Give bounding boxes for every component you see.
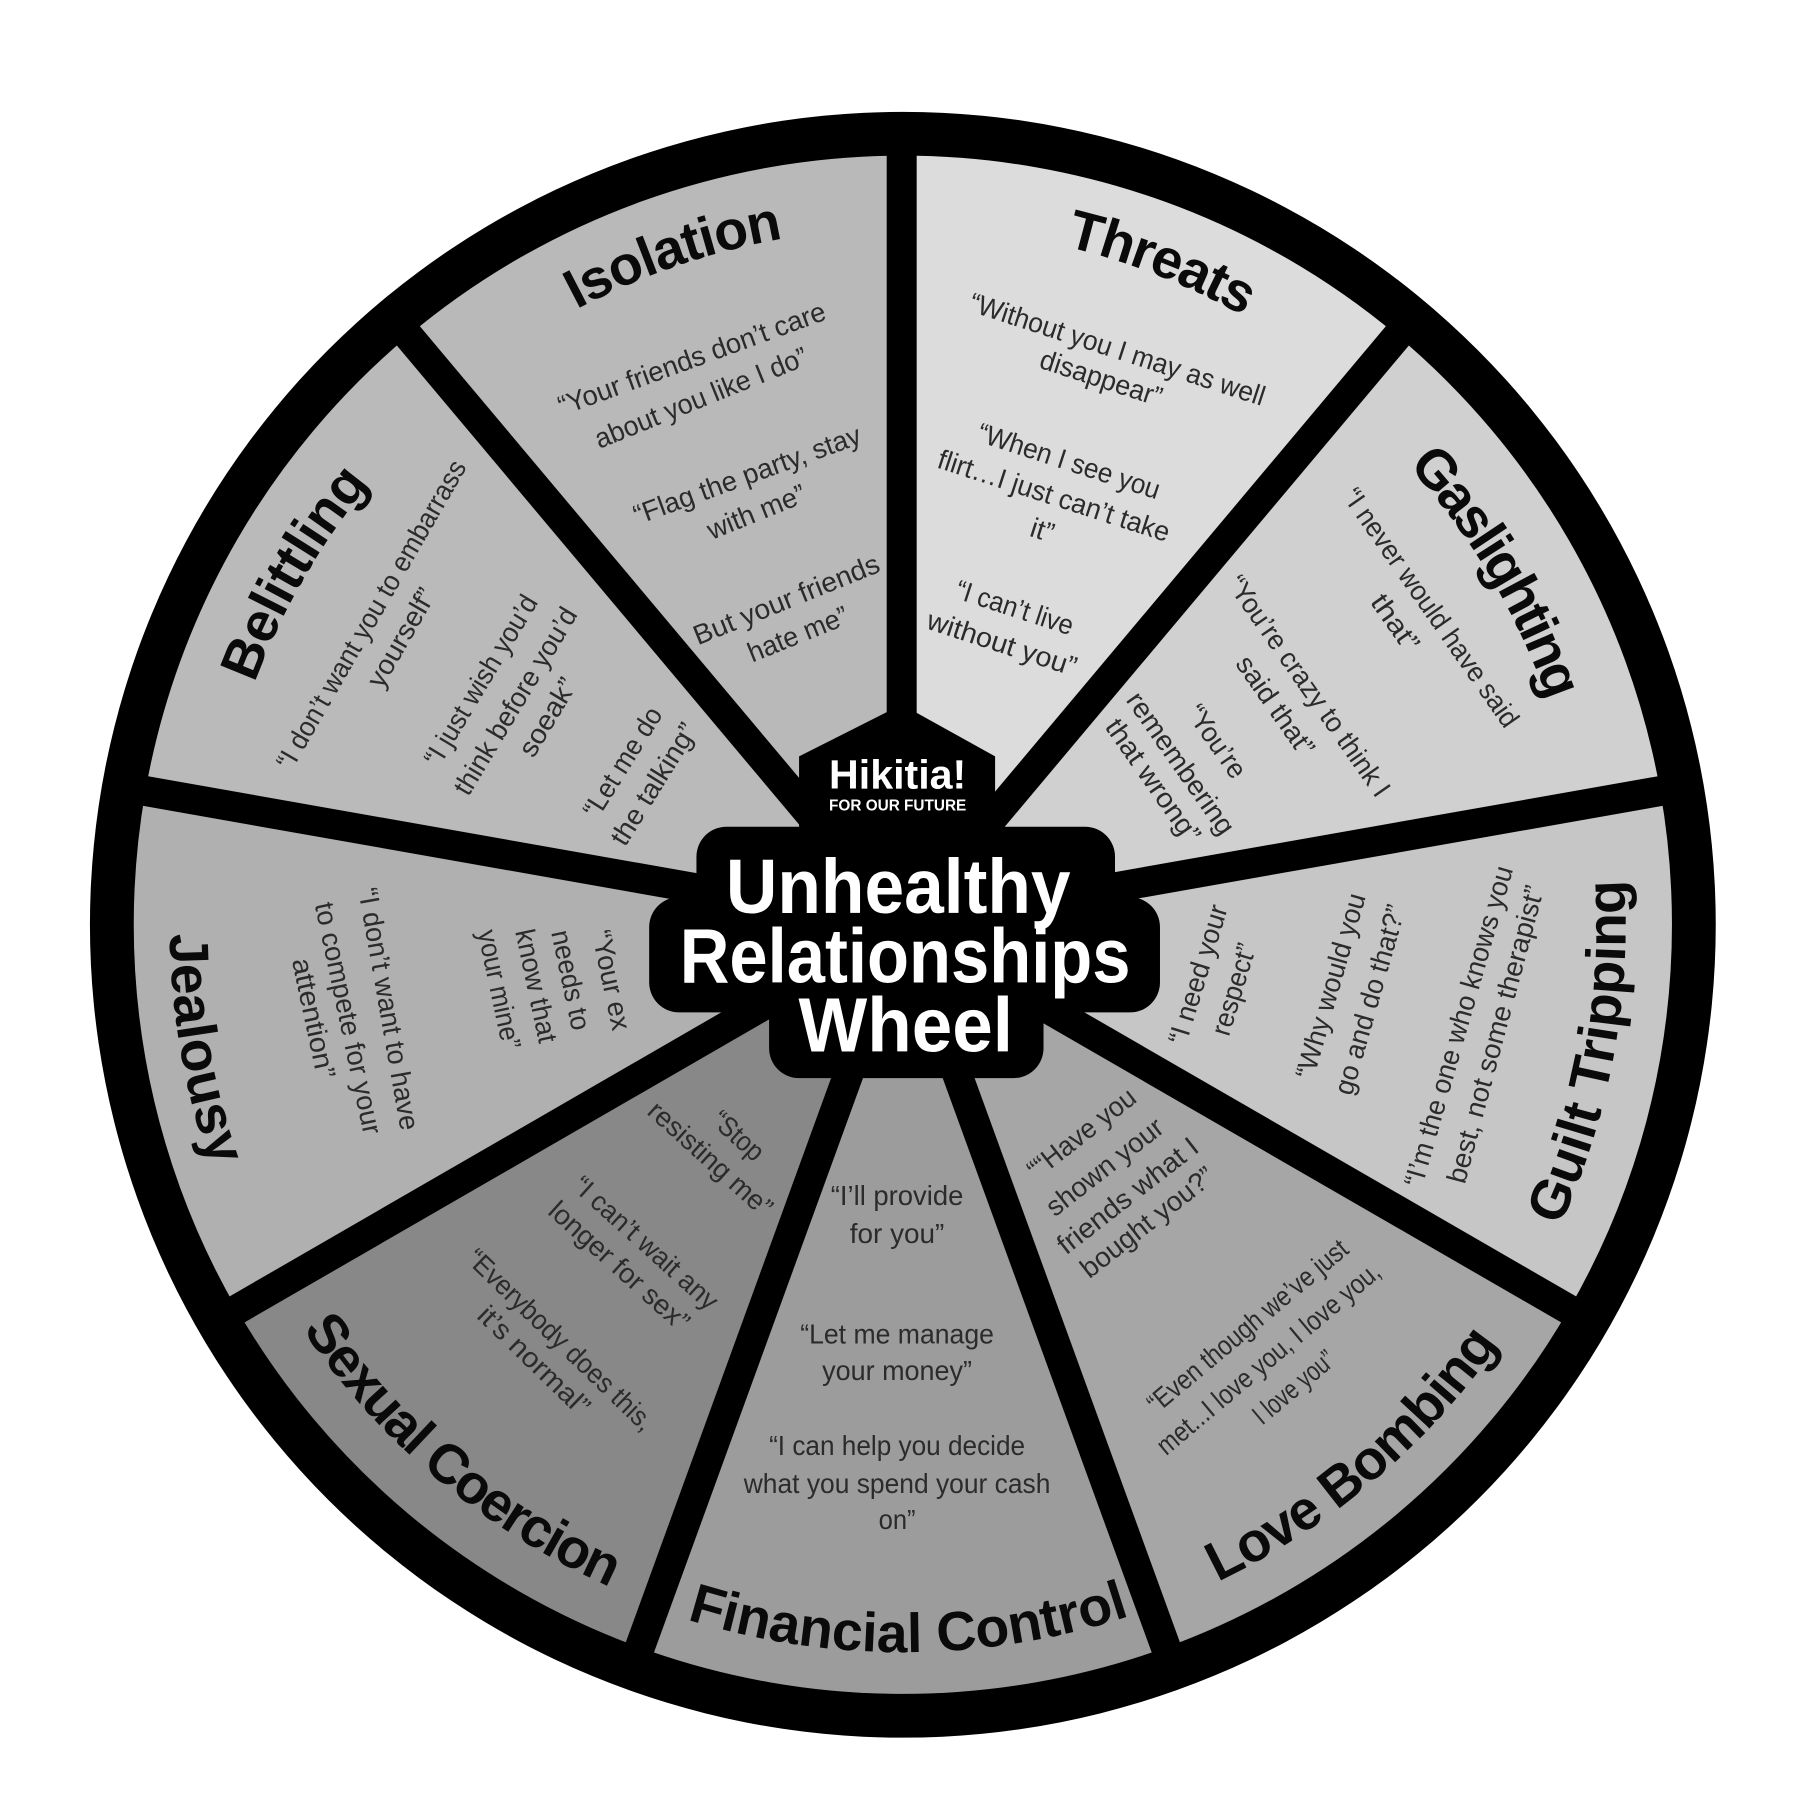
quotes: Gaslighting: that” <box>1365 588 1426 657</box>
quotes: Love Bombing: “Even though we’ve just <box>1141 1233 1354 1419</box>
quotes: Belittling: yourself” <box>360 582 442 693</box>
quotes: Financial Control: your money” <box>822 1355 972 1386</box>
segment: Gaslighting background <box>903 336 1660 925</box>
quotes: Belittling: “I don’t want you to embarrass <box>270 454 472 774</box>
title: Unhealthy Relationships Wheel: Relationships <box>680 913 1131 999</box>
quotes: Financial Control: on” <box>879 1504 916 1535</box>
quotes: Gaslighting: remembering <box>1120 686 1242 841</box>
segment: Jealousy background <box>134 791 903 1309</box>
quotes: Isolation: “Your friends don’t care <box>554 295 830 421</box>
quotes: Financial Control: “Let me manage <box>800 1318 994 1349</box>
quotes: Jealousy: needs to <box>545 927 597 1033</box>
quotes: Isolation: But your friends <box>689 548 884 651</box>
quotes: Belittling <box>270 454 703 851</box>
title: Unhealthy Relationships Wheel: Wheel <box>798 983 1013 1069</box>
heading: Threats: Threats <box>1074 210 1252 312</box>
quotes: Threats: “I can’t live <box>952 574 1078 641</box>
quotes: Guilt Tripping: go and do that?” <box>1328 901 1411 1098</box>
panel: Jealousy <box>134 806 722 1296</box>
quotes: Sexual Coercion: resisting me” <box>642 1095 779 1223</box>
quotes: Sexual Coercion: “Stop <box>705 1104 771 1167</box>
quotes: Belittling: think before you’d <box>447 602 583 800</box>
heading: Sexual Coercion: Sexual Coercion <box>308 1314 616 1586</box>
panel: Isolation <box>420 156 887 778</box>
quotes: Sexual Coercion: longer for sex” <box>543 1195 696 1337</box>
heading: Belittling: Belittling <box>220 468 372 680</box>
panel: Threats <box>916 156 1386 792</box>
quotes: Love Bombing: I love you” <box>1246 1344 1341 1430</box>
hub: logo block <box>799 705 995 842</box>
panel: Belittling <box>148 346 800 874</box>
quotes: Threats: it” <box>1027 512 1058 548</box>
quotes: Isolation: hate me” <box>743 600 853 668</box>
segment: Sexual Coercion background <box>237 925 903 1648</box>
quotes: Love Bombing: shown your <box>1039 1111 1169 1222</box>
heading: Guilt Tripping: Guilt Tripping <box>1530 884 1637 1220</box>
quotes: Threats: “When I see you <box>974 417 1164 505</box>
quotes: Guilt Tripping: best, not some therapist” <box>1441 882 1550 1186</box>
quotes: Love Bombing <box>1021 1081 1386 1461</box>
quotes: Gaslighting <box>1099 482 1526 848</box>
quotes: Guilt Tripping: “I need your <box>1162 901 1234 1048</box>
quotes: Financial Control: “I’ll provide <box>831 1180 963 1211</box>
panel: Guilt Tripping <box>1084 806 1672 1296</box>
logo: Hikitia! For Our Future: FOR OUR FUTURE <box>829 798 966 815</box>
segment: Belittling background <box>145 336 903 925</box>
quotes: Guilt Tripping: respect” <box>1205 940 1262 1039</box>
heading: Gaslighting: Gaslighting <box>1416 449 1574 698</box>
quotes: Guilt Tripping: “I’m the one who knows you <box>1398 862 1519 1190</box>
quotes: Threats: disappear” <box>1036 344 1166 412</box>
segment: Isolation background <box>409 156 903 925</box>
panel: Financial Control <box>654 1078 1152 1694</box>
hub: top title block <box>696 827 1115 951</box>
quotes: Isolation <box>554 295 884 668</box>
quotes: Sexual Coercion: “Everybody does this, <box>461 1242 661 1437</box>
quotes: Jealousy: “I don’t want to have <box>352 885 425 1133</box>
quotes: Belittling: soeak” <box>512 672 583 762</box>
quotes: Guilt Tripping <box>1162 862 1550 1190</box>
segment: Financial Control background <box>640 925 1166 1694</box>
wheel spokes <box>126 138 1680 1666</box>
title: Unhealthy Relationships Wheel <box>680 844 1131 1069</box>
quotes: Isolation: about you like I do” <box>590 341 812 454</box>
panel: Love Bombing <box>974 1023 1561 1642</box>
quotes: Sexual Coercion: it’s normal” <box>471 1299 597 1422</box>
quotes: Jealousy: attention” <box>286 955 342 1081</box>
logo: Hikitia! For Our Future: Hikitia! <box>829 752 966 798</box>
quotes: Belittling: the talking” <box>604 717 703 851</box>
quotes: Gaslighting: “You’re crazy to think I <box>1221 569 1397 803</box>
heading: Jealousy: Jealousy <box>169 934 238 1158</box>
panel: Sexual Coercion <box>244 1019 831 1642</box>
central hub <box>649 705 1160 1078</box>
quotes: Jealousy: to compete for your <box>309 899 388 1137</box>
quotes: Financial Control: “I can help you decide <box>769 1430 1025 1461</box>
quotes: Threats <box>922 287 1269 682</box>
quotes: Threats: without you” <box>922 604 1081 682</box>
quotes: Guilt Tripping: “Why would you <box>1289 890 1372 1082</box>
segment: Guilt Tripping background <box>903 791 1672 1309</box>
quotes: Financial Control <box>743 1180 1050 1535</box>
hub: bottom title block <box>769 974 1044 1078</box>
segment: Love Bombing background <box>903 925 1569 1648</box>
heading: Financial Control: Financial Control <box>690 1578 1126 1653</box>
quotes: Jealousy <box>286 885 637 1137</box>
quotes: Gaslighting: “You’re <box>1180 698 1253 784</box>
quotes: Love Bombing: friends what I <box>1051 1131 1204 1260</box>
quotes: Isolation: with me” <box>701 478 810 546</box>
quotes: Jealousy: your mine” <box>472 927 527 1052</box>
quotes: Jealousy: “Your ex <box>586 927 637 1033</box>
hub: middle title block <box>649 897 1160 1012</box>
quotes: Gaslighting: “I never would have said <box>1337 482 1526 733</box>
quotes: Isolation: “Flag the party, stay <box>629 419 865 530</box>
quotes: Gaslighting: that wrong” <box>1099 713 1207 848</box>
quotes: Love Bombing: met...I love you, I love you, <box>1150 1255 1386 1461</box>
quotes: Financial Control: what you spend your cash <box>743 1468 1050 1499</box>
heading: Isolation: Isolation <box>562 212 780 308</box>
heading: Love Bombing: Love Bombing <box>1204 1329 1502 1580</box>
quotes: Sexual Coercion <box>461 1095 779 1437</box>
panel: Gaslighting <box>1004 346 1658 872</box>
quotes: Threats: flirt…I just can’t take <box>934 443 1174 548</box>
quotes: Love Bombing: bought you?” <box>1074 1160 1220 1284</box>
quotes: Threats: “Without you I may as well <box>966 287 1269 412</box>
segment: Threats background <box>903 156 1397 925</box>
quotes: Sexual Coercion: “I can’t wait any <box>567 1170 725 1316</box>
quotes: Jealousy: know that <box>509 926 564 1046</box>
quotes: Belittling: “I just wish you’d <box>417 589 544 771</box>
quotes: Gaslighting: said that” <box>1230 649 1321 762</box>
title: Unhealthy Relationships Wheel: Unhealthy <box>726 844 1071 930</box>
quotes: Belittling: “Let me do <box>576 701 669 823</box>
quotes: Love Bombing: ““Have you <box>1021 1081 1142 1185</box>
quotes: Financial Control: for you” <box>850 1218 944 1249</box>
